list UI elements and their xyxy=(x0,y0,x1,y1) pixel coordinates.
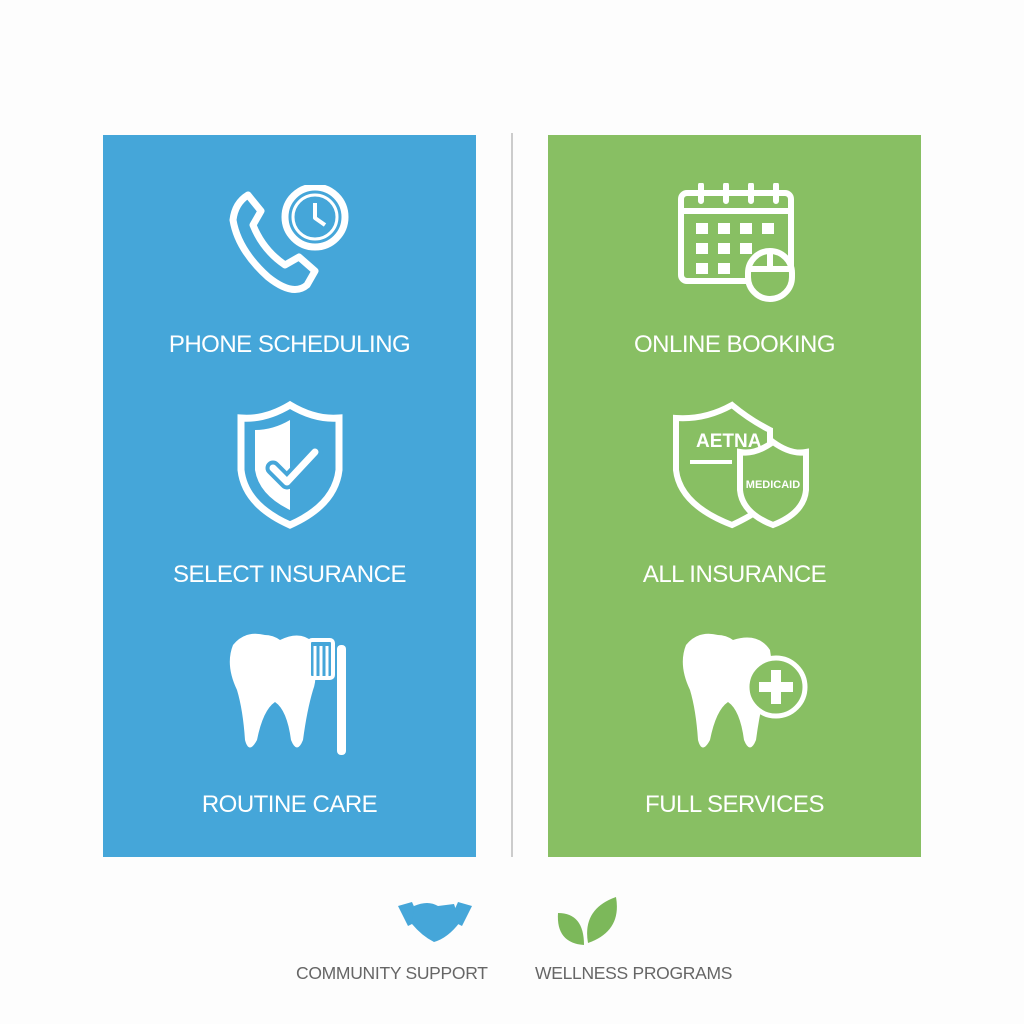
icon: calendar with mouse xyxy=(678,183,795,302)
icon: insurance shields: AETNA xyxy=(696,431,762,452)
icon: tooth with plus xyxy=(682,634,808,748)
icon: handshake xyxy=(398,902,472,942)
label: select insurance: SELECT INSURANCE xyxy=(173,561,406,588)
label: all insurance: ALL INSURANCE xyxy=(643,561,826,588)
divider xyxy=(511,133,513,857)
panel: blue (current) xyxy=(103,135,476,857)
label: routine care: ROUTINE CARE xyxy=(202,791,377,818)
text: wellness programs: WELLNESS PROGRAMS xyxy=(535,963,732,983)
icon: insurance shields: MEDICAID xyxy=(746,479,800,491)
icon: shield check xyxy=(238,401,342,529)
label: phone scheduling: PHONE SCHEDULING xyxy=(169,331,410,358)
icon: leaves xyxy=(558,897,617,945)
icon: insurance shields xyxy=(673,401,809,528)
label: online booking: ONLINE BOOKING xyxy=(634,331,835,358)
icon: tooth with toothbrush xyxy=(230,634,346,755)
label: full services: FULL SERVICES xyxy=(645,791,824,818)
panel: green (new) xyxy=(548,135,921,857)
text: community support: COMMUNITY SUPPORT xyxy=(296,963,488,983)
icon: phone with clock xyxy=(230,185,348,293)
